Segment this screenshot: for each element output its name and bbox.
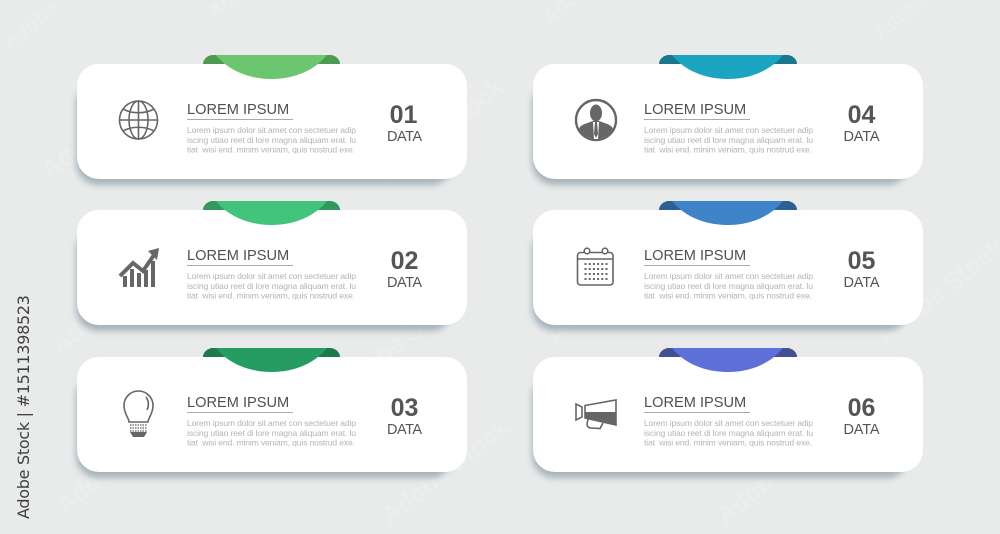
body text: Lorem ipsum dolor sit amet con sectetuer adip: [644, 418, 813, 428]
body text: Lorem ipsum dolor sit amet con sectetuer adip: [187, 418, 356, 428]
watermark pattern: Adobe Stock: [331, 284, 469, 400]
card 5: calendar: [532, 201, 923, 331]
label: DATA: [387, 129, 422, 145]
body text: Lorem ipsum dolor sit amet con sectetuer adip: [644, 125, 813, 135]
body text: Lorem ipsum dolor sit amet con sectetuer adip: [187, 271, 356, 281]
number: 02: [391, 247, 418, 275]
number: 01: [390, 101, 417, 129]
watermark pattern: Adobe Stock: [46, 244, 184, 360]
heading: LOREM IPSUM: [644, 395, 746, 411]
tab 6: [533, 348, 923, 472]
body text: Lorem ipsum dolor sit amet con sectetuer adip: [187, 125, 356, 135]
label: DATA: [844, 129, 880, 145]
label: DATA: [844, 275, 880, 291]
number: 04: [848, 101, 875, 129]
tab 1: [77, 55, 467, 179]
body text: [187, 418, 356, 448]
body text: [644, 271, 813, 300]
icon: growth chart: [120, 248, 159, 287]
heading: LOREM IPSUM: [187, 395, 289, 411]
body text: [644, 125, 813, 154]
body text: iscing utiao reet di lore magna aliquam erat. lu: [644, 135, 813, 145]
icon: globe: [120, 101, 158, 139]
body text: iscing utiao reet di lore magna aliquam erat. lu: [644, 428, 813, 438]
watermark pattern: Adobe Stock: [711, 414, 849, 530]
body text: [187, 125, 356, 154]
body text: iscing utiao reet di lore magna aliquam erat. lu: [187, 135, 356, 145]
body text: tiat wisi end. minim veniam, quis nostrud exe.: [187, 438, 355, 448]
body text: Lorem ipsum dolor sit amet con sectetuer adip: [644, 271, 813, 281]
card 1: globe: [76, 55, 467, 185]
tab 4: [533, 55, 923, 179]
card 2: growth chart: [76, 201, 467, 331]
body text: tiat wisi end. minim veniam, quis nostrud exe.: [644, 144, 812, 154]
body text: iscing utiao reet di lore magna aliquam erat. lu: [644, 281, 813, 291]
watermark pattern: Adobe Stock: [541, 234, 679, 350]
body text: iscing utiao reet di lore magna aliquam erat. lu: [187, 428, 356, 438]
credit text: Adobe Stock | #1511398523: [14, 295, 33, 519]
card 6: megaphone: [532, 348, 923, 478]
icon: businessman: [576, 100, 616, 142]
heading: LOREM IPSUM: [644, 248, 746, 264]
watermark pattern: Adobe Stock: [701, 69, 839, 185]
icon: megaphone: [576, 400, 616, 428]
number: 03: [391, 394, 418, 422]
body text: tiat wisi end. minim veniam, quis nostrud exe.: [644, 438, 812, 448]
tab 3: [77, 348, 467, 472]
tab 2: [77, 201, 467, 325]
icon: calendar: [578, 248, 613, 285]
label: DATA: [844, 422, 880, 438]
watermark pattern: Adobe Stock: [376, 414, 514, 530]
number: 05: [848, 247, 875, 275]
watermark pattern: Adobe Stock: [36, 69, 174, 185]
body text: iscing utiao reet di lore magna aliquam erat. lu: [187, 281, 356, 291]
heading: LOREM IPSUM: [644, 102, 746, 118]
body text: [644, 418, 813, 448]
body text: tiat wisi end. minim veniam, quis nostrud exe.: [644, 290, 812, 300]
watermark pattern: Adobe Stock: [51, 404, 189, 520]
icon: light bulb: [124, 391, 153, 437]
body text: tiat wisi end. minim veniam, quis nostrud exe.: [187, 290, 355, 300]
heading: LOREM IPSUM: [187, 102, 289, 118]
heading: LOREM IPSUM: [187, 248, 289, 264]
label: DATA: [387, 422, 422, 438]
tab 5: [533, 201, 923, 325]
number: 06: [848, 394, 875, 422]
body text: tiat wisi end. minim veniam, quis nostrud exe.: [187, 144, 355, 154]
body text: [187, 271, 356, 300]
card 4: businessman: [532, 55, 923, 185]
label: DATA: [387, 275, 422, 291]
card 3: light bulb: [76, 348, 467, 478]
watermark pattern: Adobe Stock: [371, 74, 509, 190]
